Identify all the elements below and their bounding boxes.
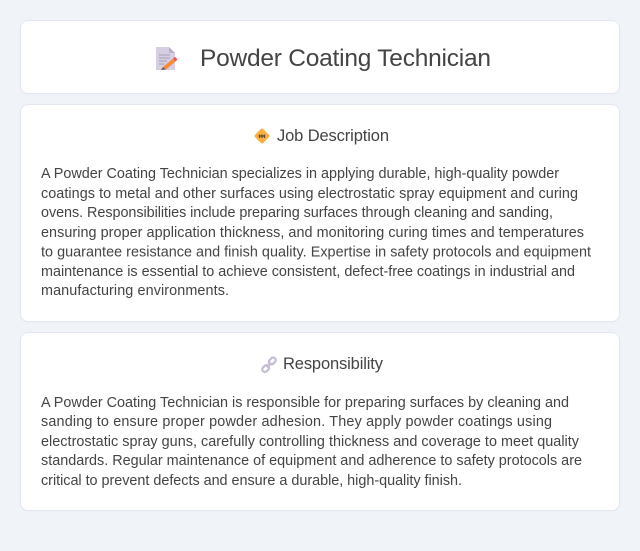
text block: responsibility xyxy=(41,395,582,489)
text block: responsibility: sanding to ensure proper powder adhesion. They apply powder coatings using xyxy=(41,414,552,430)
panel: job description xyxy=(20,104,620,322)
heading: responsibility: Responsibility xyxy=(283,355,384,373)
icon: chain link xyxy=(261,356,277,374)
text block: job description: to guarantee resistance and finish quality. Expertise in safety protocols and equipment xyxy=(41,244,591,260)
heading: job description: Job Description xyxy=(277,127,389,145)
text block: job description: manufacturing environments. xyxy=(41,283,229,299)
text block: job description: coatings to metal and other surfaces using electrostatic spray equipment and curing xyxy=(41,186,578,202)
text block: job description: A Powder Coating Technician specializes in applying durable, high-quality powder xyxy=(41,166,559,182)
icon: document with pencil xyxy=(156,47,178,70)
panel: responsibility xyxy=(20,332,620,511)
icon: construction diamond xyxy=(254,128,270,144)
text block: responsibility: A Powder Coating Technician is responsible for preparing surfaces by cleaning and xyxy=(41,395,569,411)
panel: title card xyxy=(20,20,620,94)
text block: job description: maintenance is essential to achieve consistent, defect-free coatings in industrial and xyxy=(41,264,575,280)
text block: job description: ensuring proper application thickness, and monitoring curing times and temperatures xyxy=(41,225,584,241)
text block: responsibility: standards. Regular maintenance of equipment and adherence to safety protocols are xyxy=(41,453,582,469)
text block: responsibility: electrostatic spray guns, carefully controlling thickness and coverage to meet quality xyxy=(41,434,580,450)
text block: responsibility: critical to prevent defects and ensure a durable, high-quality finish. xyxy=(41,473,462,489)
text block: job description: ovens. Responsibilities include preparing surfaces through cleaning and sanding, xyxy=(41,205,553,221)
text block: job description xyxy=(41,166,591,299)
title: Powder Coating Technician xyxy=(200,45,491,72)
